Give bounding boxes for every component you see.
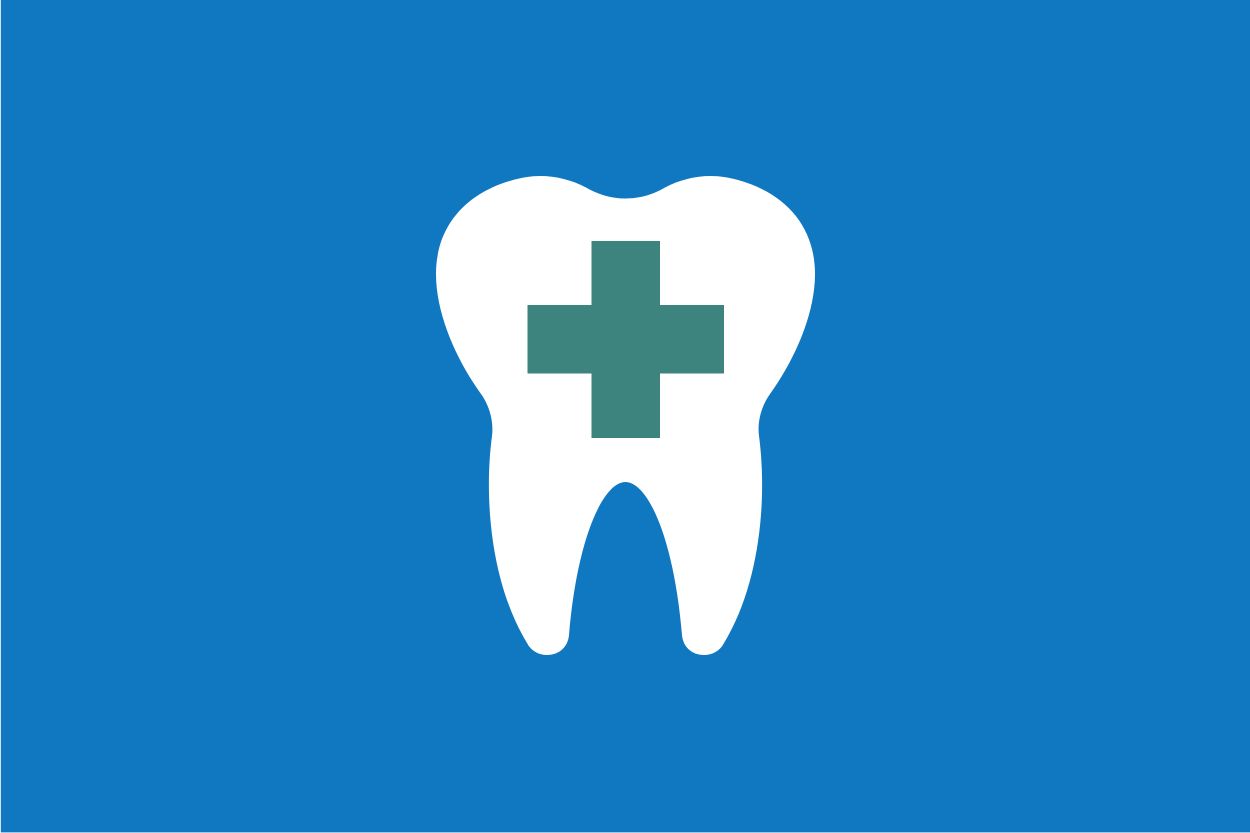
icon: green cross bbox=[528, 241, 724, 438]
icon: white tooth bbox=[436, 176, 815, 655]
